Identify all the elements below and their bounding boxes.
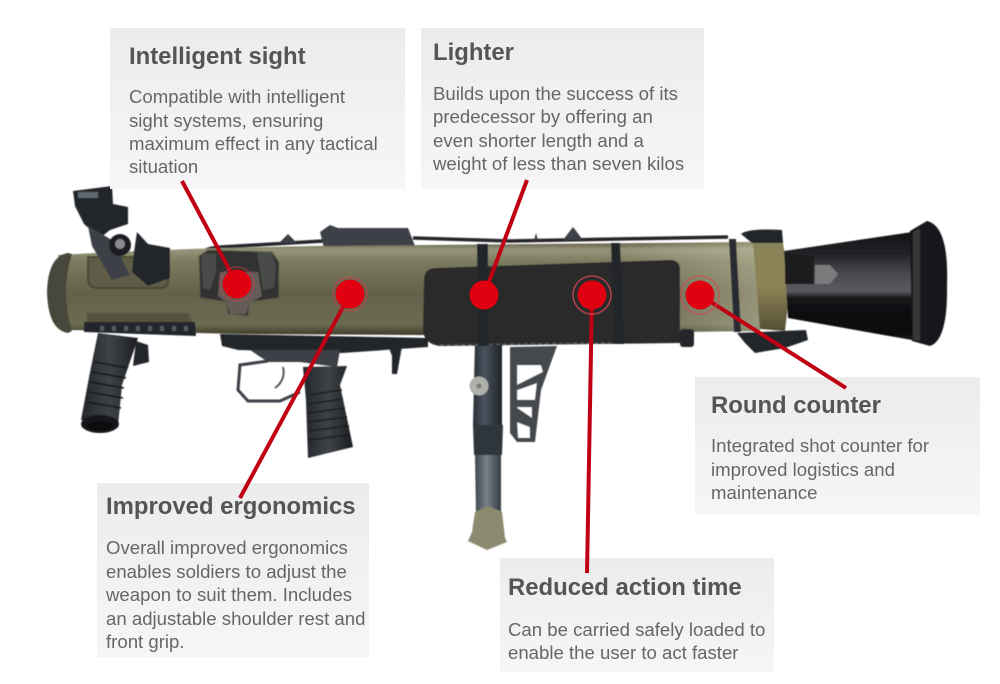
black grip wrap [423, 260, 680, 346]
marker: round counter [681, 276, 719, 314]
heading: intelligent sight: Intelligent sight [129, 43, 306, 70]
top cable [203, 237, 728, 252]
text: reduced action time description: Can be carried safely loaded to [508, 619, 765, 640]
lower tube ridge [680, 329, 694, 347]
straps [477, 243, 624, 346]
text: round counter description [711, 435, 929, 503]
text: improved ergonomics description [105, 537, 365, 652]
folding stock [510, 346, 557, 442]
pistol grip and trigger group [220, 334, 428, 458]
text: intelligent sight description: maximum effect in any tactical [129, 133, 378, 154]
panel: improved ergonomics [97, 483, 369, 657]
foregrip and rail [81, 313, 196, 433]
callout line: intelligent sight [182, 181, 237, 284]
text: lighter description: even shorter length and a [433, 130, 645, 151]
callout line: round counter [700, 295, 846, 388]
callout line: improved ergonomics [240, 294, 350, 498]
text: improved ergonomics description: enables soldiers to adjust the [106, 561, 347, 582]
callout line: reduced action time [587, 295, 592, 573]
marker: reduced action time [573, 276, 611, 314]
text: round counter description: improved logistics and [711, 459, 895, 480]
text: improved ergonomics description: front grip. [106, 631, 185, 652]
launcher tube [58, 242, 760, 335]
text: improved ergonomics description: weapon to suit them. Includes [105, 584, 352, 605]
marker: lighter [470, 280, 498, 310]
wrap bottom edge [440, 343, 610, 345]
heading: reduced action time: Reduced action time [508, 574, 742, 601]
text: lighter description: predecessor by offering an [433, 106, 653, 127]
panel: lighter [421, 28, 704, 189]
text: round counter description: Integrated shot counter for [711, 435, 929, 456]
text: intelligent sight description: sight systems, ensuring [129, 110, 323, 131]
panel: reduced action time [500, 558, 774, 672]
text: intelligent sight description [129, 86, 378, 177]
text: intelligent sight description: Compatible with intelligent [129, 86, 346, 107]
venturi bell [784, 221, 947, 346]
heading: round counter: Round counter [711, 392, 881, 419]
heading: lighter: Lighter [433, 39, 514, 66]
text: reduced action time description [508, 619, 765, 663]
text: lighter description [432, 83, 684, 174]
sight mount recess [88, 257, 168, 288]
callout line: lighter [484, 180, 527, 295]
text: intelligent sight description: situation [129, 156, 198, 177]
text: improved ergonomics description: an adjustable shoulder rest and [106, 608, 365, 629]
heading: improved ergonomics: Improved ergonomics [106, 493, 356, 520]
sight bracket on tube [199, 250, 279, 316]
text: reduced action time description: enable the user to act faster [508, 642, 738, 663]
cable knobs [279, 227, 583, 243]
text: lighter description: Builds upon the success of its [433, 83, 678, 104]
rear coupling [753, 243, 790, 331]
text: improved ergonomics description: Overall improved ergonomics [106, 537, 348, 558]
text: round counter description: maintenance [711, 482, 817, 503]
marker: intelligent sight [220, 267, 254, 301]
text: lighter description: weight of less than seven kilos [432, 153, 684, 174]
top rail unit [320, 225, 415, 248]
rear ring [47, 253, 72, 333]
panel: round counter [695, 377, 980, 514]
weapon illustration [47, 186, 947, 550]
panel: intelligent sight [110, 28, 405, 189]
bipod leg [468, 340, 507, 550]
marker: improved ergonomics [333, 277, 367, 311]
optical sight [73, 186, 170, 286]
